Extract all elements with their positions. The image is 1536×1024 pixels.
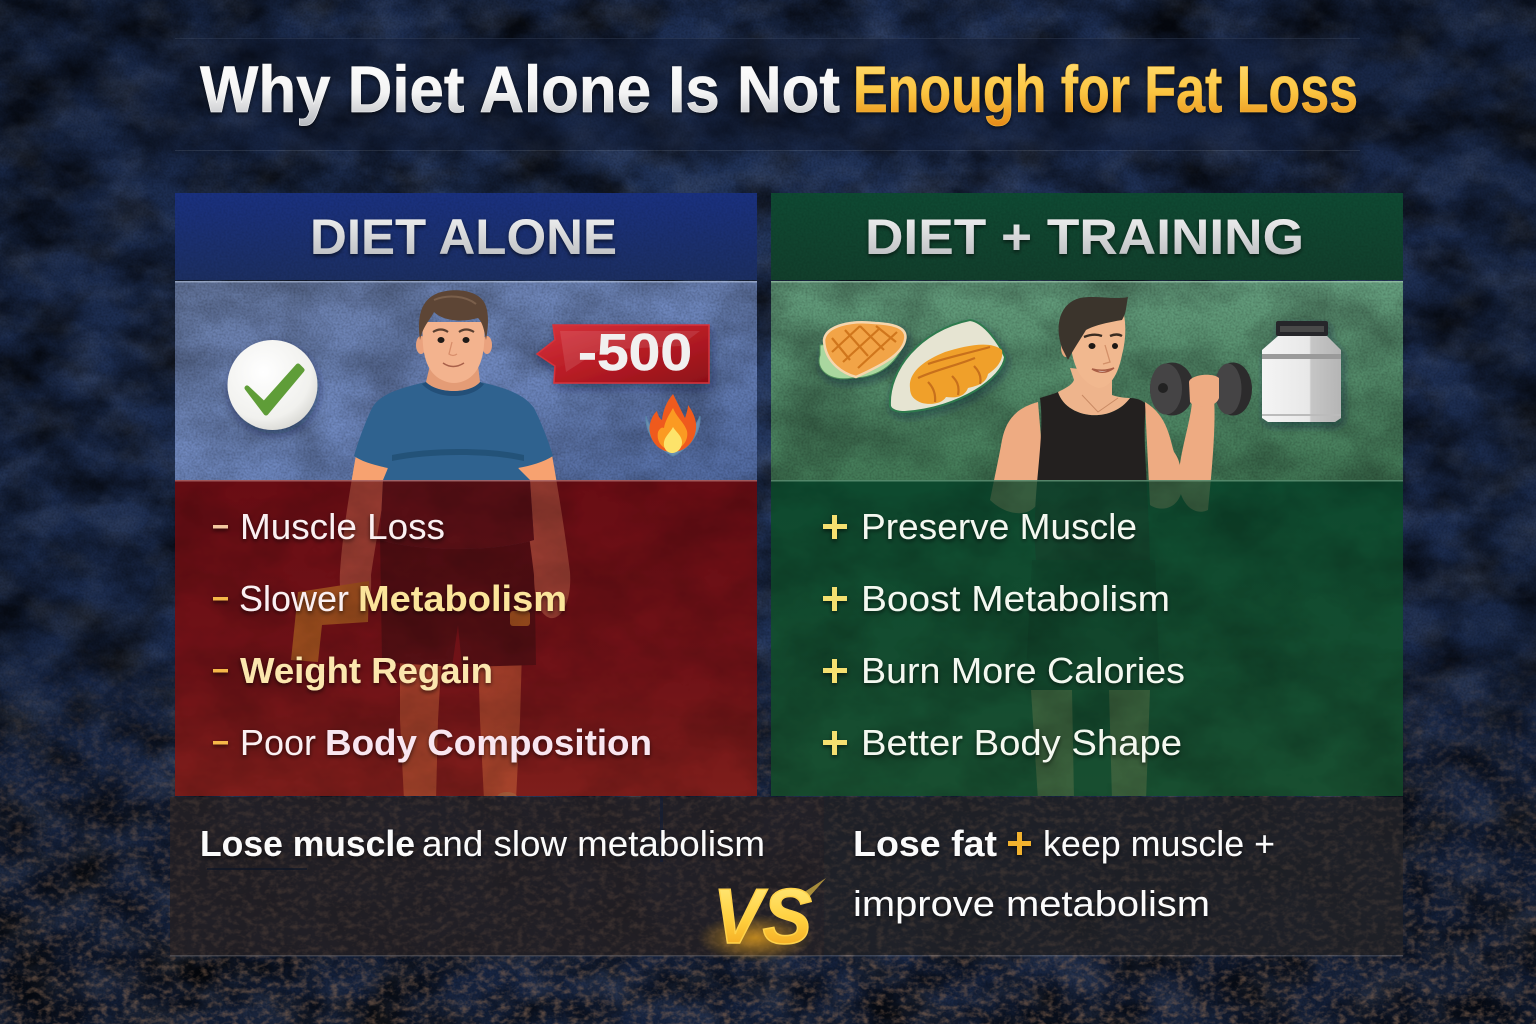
legs bbox=[1031, 690, 1074, 800]
shorts bbox=[1025, 560, 1160, 690]
title band bbox=[120, 38, 1416, 151]
icon: -500 calorie badge bbox=[537, 324, 709, 383]
item: slower metabolism: Metabolism bbox=[358, 578, 567, 619]
panel: bottom summary bbox=[170, 797, 1403, 962]
item: slower metabolism: Slower bbox=[239, 578, 349, 619]
item: better body shape: Better Body Shape bbox=[861, 722, 1182, 763]
title: Enough for Fat Loss bbox=[853, 52, 1358, 126]
shirt bbox=[354, 382, 553, 549]
diet alone heading bbox=[175, 193, 757, 280]
ears bbox=[416, 336, 424, 354]
hair bbox=[1059, 297, 1128, 360]
hair bbox=[419, 290, 488, 340]
item: poor body composition: Body Composition bbox=[325, 722, 652, 763]
icon: check mark bbox=[228, 340, 318, 430]
icon: -500 calorie badge: -500 bbox=[578, 324, 692, 382]
summary: diet alone: and slow metabolism bbox=[422, 823, 765, 864]
legs bbox=[400, 663, 441, 796]
diet + training heading: DIET + TRAINING bbox=[865, 209, 1304, 265]
neck bbox=[426, 365, 480, 391]
icon: flame bbox=[646, 394, 700, 456]
left arm bbox=[990, 402, 1042, 513]
panel: diet alone bbox=[175, 193, 757, 802]
arms bbox=[340, 455, 388, 618]
icon: dumbbell bbox=[1150, 362, 1252, 416]
eyes and mouth bbox=[1088, 343, 1096, 349]
list background green bbox=[771, 480, 1403, 796]
eyes and mouth bbox=[438, 337, 444, 343]
summary: diet alone bbox=[200, 823, 765, 864]
face bbox=[423, 322, 484, 383]
list background red bbox=[175, 480, 757, 796]
icon: supplement jar bbox=[1262, 321, 1341, 422]
title: Why Diet Alone Is Not bbox=[200, 52, 840, 126]
item: muscle loss: Muscle Loss bbox=[240, 506, 445, 547]
lowered hand bbox=[1038, 490, 1096, 550]
list overlay red bbox=[175, 480, 757, 796]
VS badge: VS bbox=[713, 872, 812, 960]
panel: diet + training bbox=[771, 193, 1403, 800]
shirt below panel line bbox=[380, 481, 534, 549]
title bbox=[200, 52, 1358, 126]
shoe bbox=[498, 792, 517, 796]
measuring tape bbox=[291, 581, 369, 662]
summary: diet + training: keep muscle + bbox=[1043, 823, 1275, 864]
item: boost metabolism: Boost Metabolism bbox=[861, 578, 1170, 619]
item: preserve muscle: Preserve Muscle bbox=[861, 506, 1137, 547]
right upper arm bbox=[1145, 402, 1182, 509]
icon: grilled chicken on plate bbox=[890, 320, 1005, 412]
ear bbox=[1061, 339, 1071, 357]
man: training figure with dumbbell bbox=[990, 297, 1215, 800]
item: slower metabolism bbox=[213, 578, 567, 619]
diet alone heading: DIET ALONE bbox=[310, 209, 617, 265]
list: diet alone drawbacks bbox=[213, 506, 652, 763]
item: weight regain: Weight Regain bbox=[240, 650, 493, 691]
diet + training heading bbox=[771, 193, 1403, 280]
shorts bbox=[380, 535, 536, 667]
item: poor body composition: Poor bbox=[240, 722, 316, 763]
neck and chest bbox=[1058, 368, 1130, 415]
face bbox=[1070, 315, 1125, 388]
summary: diet + training bbox=[853, 823, 1275, 924]
tank top bbox=[1035, 392, 1150, 560]
diet alone illustration background bbox=[175, 281, 757, 480]
summary: diet + training: Lose fat bbox=[853, 823, 997, 864]
summary: diet + training: improve metabolism bbox=[853, 883, 1210, 924]
list: diet + training benefits bbox=[823, 506, 1185, 763]
summary: diet alone: Lose muscle bbox=[200, 823, 415, 864]
diet + training illustration background bbox=[771, 281, 1403, 480]
right forearm bbox=[1178, 398, 1215, 512]
man: diet alone figure bbox=[291, 290, 570, 802]
icon: grilled chicken on leaf bbox=[819, 322, 906, 379]
item: burn more calories: Burn More Calories bbox=[861, 650, 1185, 691]
list overlay green bbox=[771, 480, 1403, 796]
